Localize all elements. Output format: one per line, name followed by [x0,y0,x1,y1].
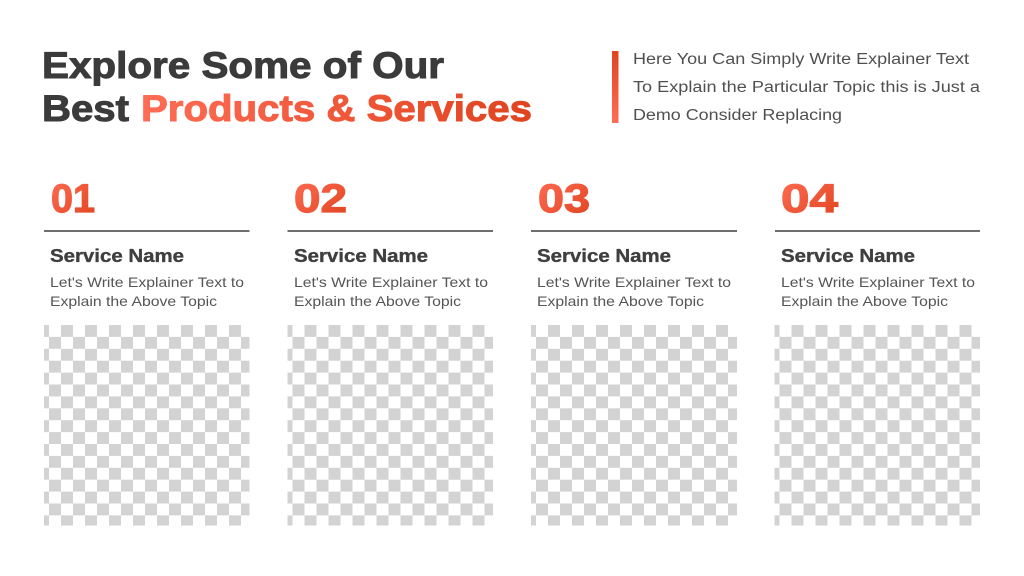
description: Let's Write Explainer Text to [294,275,488,290]
description: Explain the Above Topic [294,294,461,309]
title: Explore Some of Our [42,45,444,86]
panel: service 01 [44,177,250,526]
image placeholder [288,325,493,526]
description: Explain the Above Topic [537,294,704,309]
number 04: 04 [781,177,839,221]
description: Explain the Above Topic [50,294,217,309]
image placeholder [774,325,980,526]
intro text: Demo Consider Replacing [633,107,842,124]
description [537,275,731,309]
panel: service 02 [288,177,493,526]
title: Best [42,88,129,129]
intro text [633,51,980,124]
number 01: 01 [51,177,95,221]
panel: service 04 [774,177,980,526]
service name: Service Name [781,246,915,266]
image placeholder [44,325,250,526]
image placeholder [531,325,737,526]
title: Products & Services [141,88,532,129]
accent bar [612,51,618,123]
panel: service 03 [531,177,737,526]
title [42,45,532,129]
description: Let's Write Explainer Text to [50,275,244,290]
description [781,275,975,309]
service name: Service Name [50,246,184,266]
service name: Service Name [294,246,428,266]
description [294,275,488,309]
intro text: Here You Can Simply Write Explainer Text [633,51,970,68]
number 03: 03 [538,177,590,221]
description: Let's Write Explainer Text to [537,275,731,290]
service name: Service Name [537,246,671,266]
description: Explain the Above Topic [781,294,948,309]
intro text: To Explain the Particular Topic this is Just a [633,79,980,96]
number 02: 02 [294,177,347,221]
description [50,275,244,309]
description: Let's Write Explainer Text to [781,275,975,290]
